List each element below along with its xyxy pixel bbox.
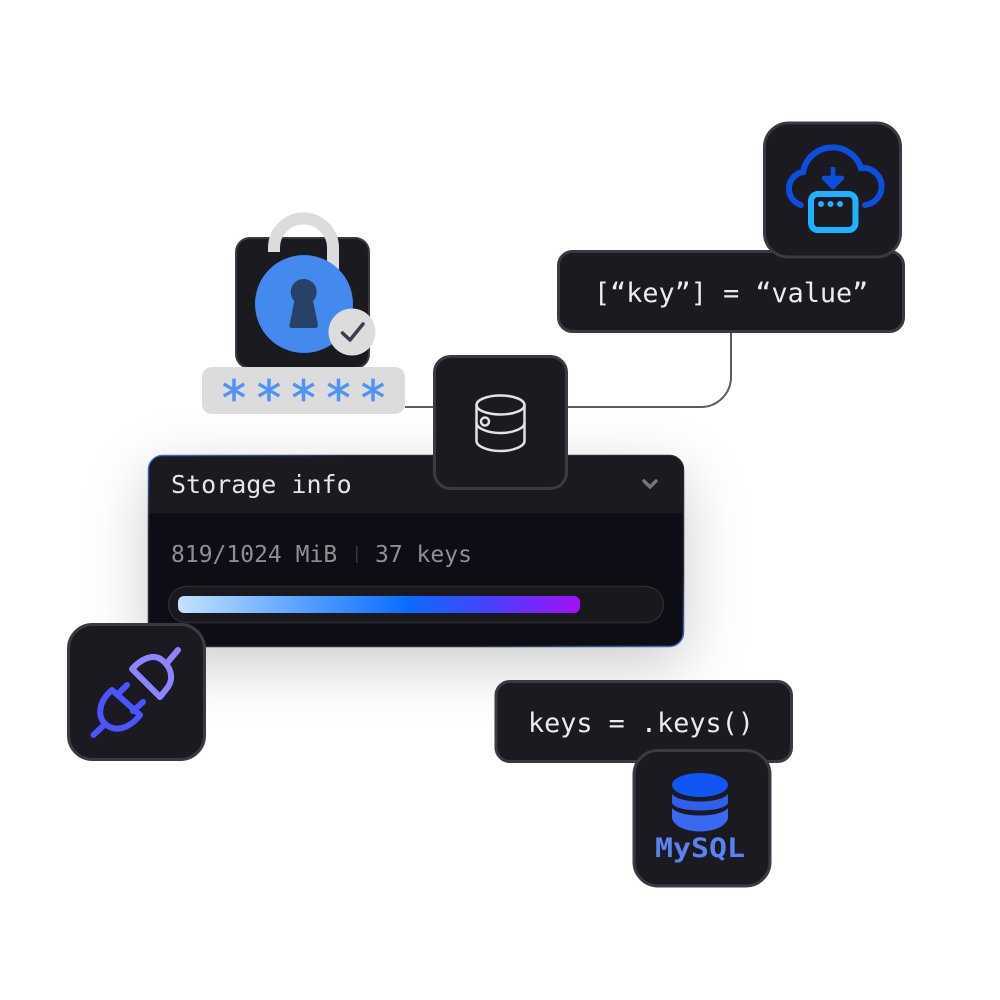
panel background — [148, 456, 684, 646]
progress track — [168, 586, 664, 622]
icon: check — [342, 324, 363, 340]
connector lines — [405, 333, 731, 407]
cloud card background — [764, 123, 900, 257]
icon: database stack — [672, 773, 728, 832]
keys code: keys = .keys() — [528, 708, 754, 739]
password mask: * — [326, 371, 350, 427]
password field — [202, 367, 405, 427]
panel: storage info — [148, 456, 684, 646]
icon: database — [476, 396, 524, 451]
card: lock — [236, 218, 376, 368]
card: mysql — [634, 750, 770, 886]
storage usage text: 819/1024 MiB — [171, 542, 337, 568]
icon: window — [811, 194, 856, 230]
card: database — [434, 356, 566, 488]
separator — [356, 546, 358, 563]
password mask — [222, 371, 385, 427]
icon: download arrow — [824, 167, 842, 187]
password background — [202, 367, 405, 414]
keys background — [496, 682, 792, 762]
panel header — [150, 456, 683, 513]
key value code: [“key”] = “value” — [594, 278, 868, 309]
password mask: * — [257, 371, 281, 427]
key value background — [558, 252, 904, 332]
icon: socket half — [132, 650, 178, 697]
icon: plug half — [94, 685, 143, 735]
password mask: * — [361, 371, 385, 427]
keyhole — [289, 279, 318, 328]
database card background — [434, 356, 566, 488]
icon: chevron — [644, 481, 656, 487]
card: plug — [68, 624, 204, 760]
code box: key value — [558, 252, 904, 332]
check badge — [328, 308, 376, 356]
lock shackle — [274, 218, 333, 285]
card: cloud download — [764, 123, 900, 257]
icon: cloud — [789, 147, 882, 205]
heading: storage info: Storage info — [171, 470, 352, 499]
password mask: * — [292, 371, 316, 427]
progress bar — [178, 596, 580, 613]
code box: keys — [496, 682, 792, 762]
plug card background — [68, 624, 204, 760]
mysql label: MySQL — [655, 833, 745, 864]
lock body — [255, 255, 353, 353]
mysql card background — [634, 750, 770, 886]
window dots — [818, 201, 843, 207]
keys count text: 37 keys — [375, 542, 472, 568]
lock card background — [236, 238, 369, 368]
password mask: * — [222, 371, 246, 427]
